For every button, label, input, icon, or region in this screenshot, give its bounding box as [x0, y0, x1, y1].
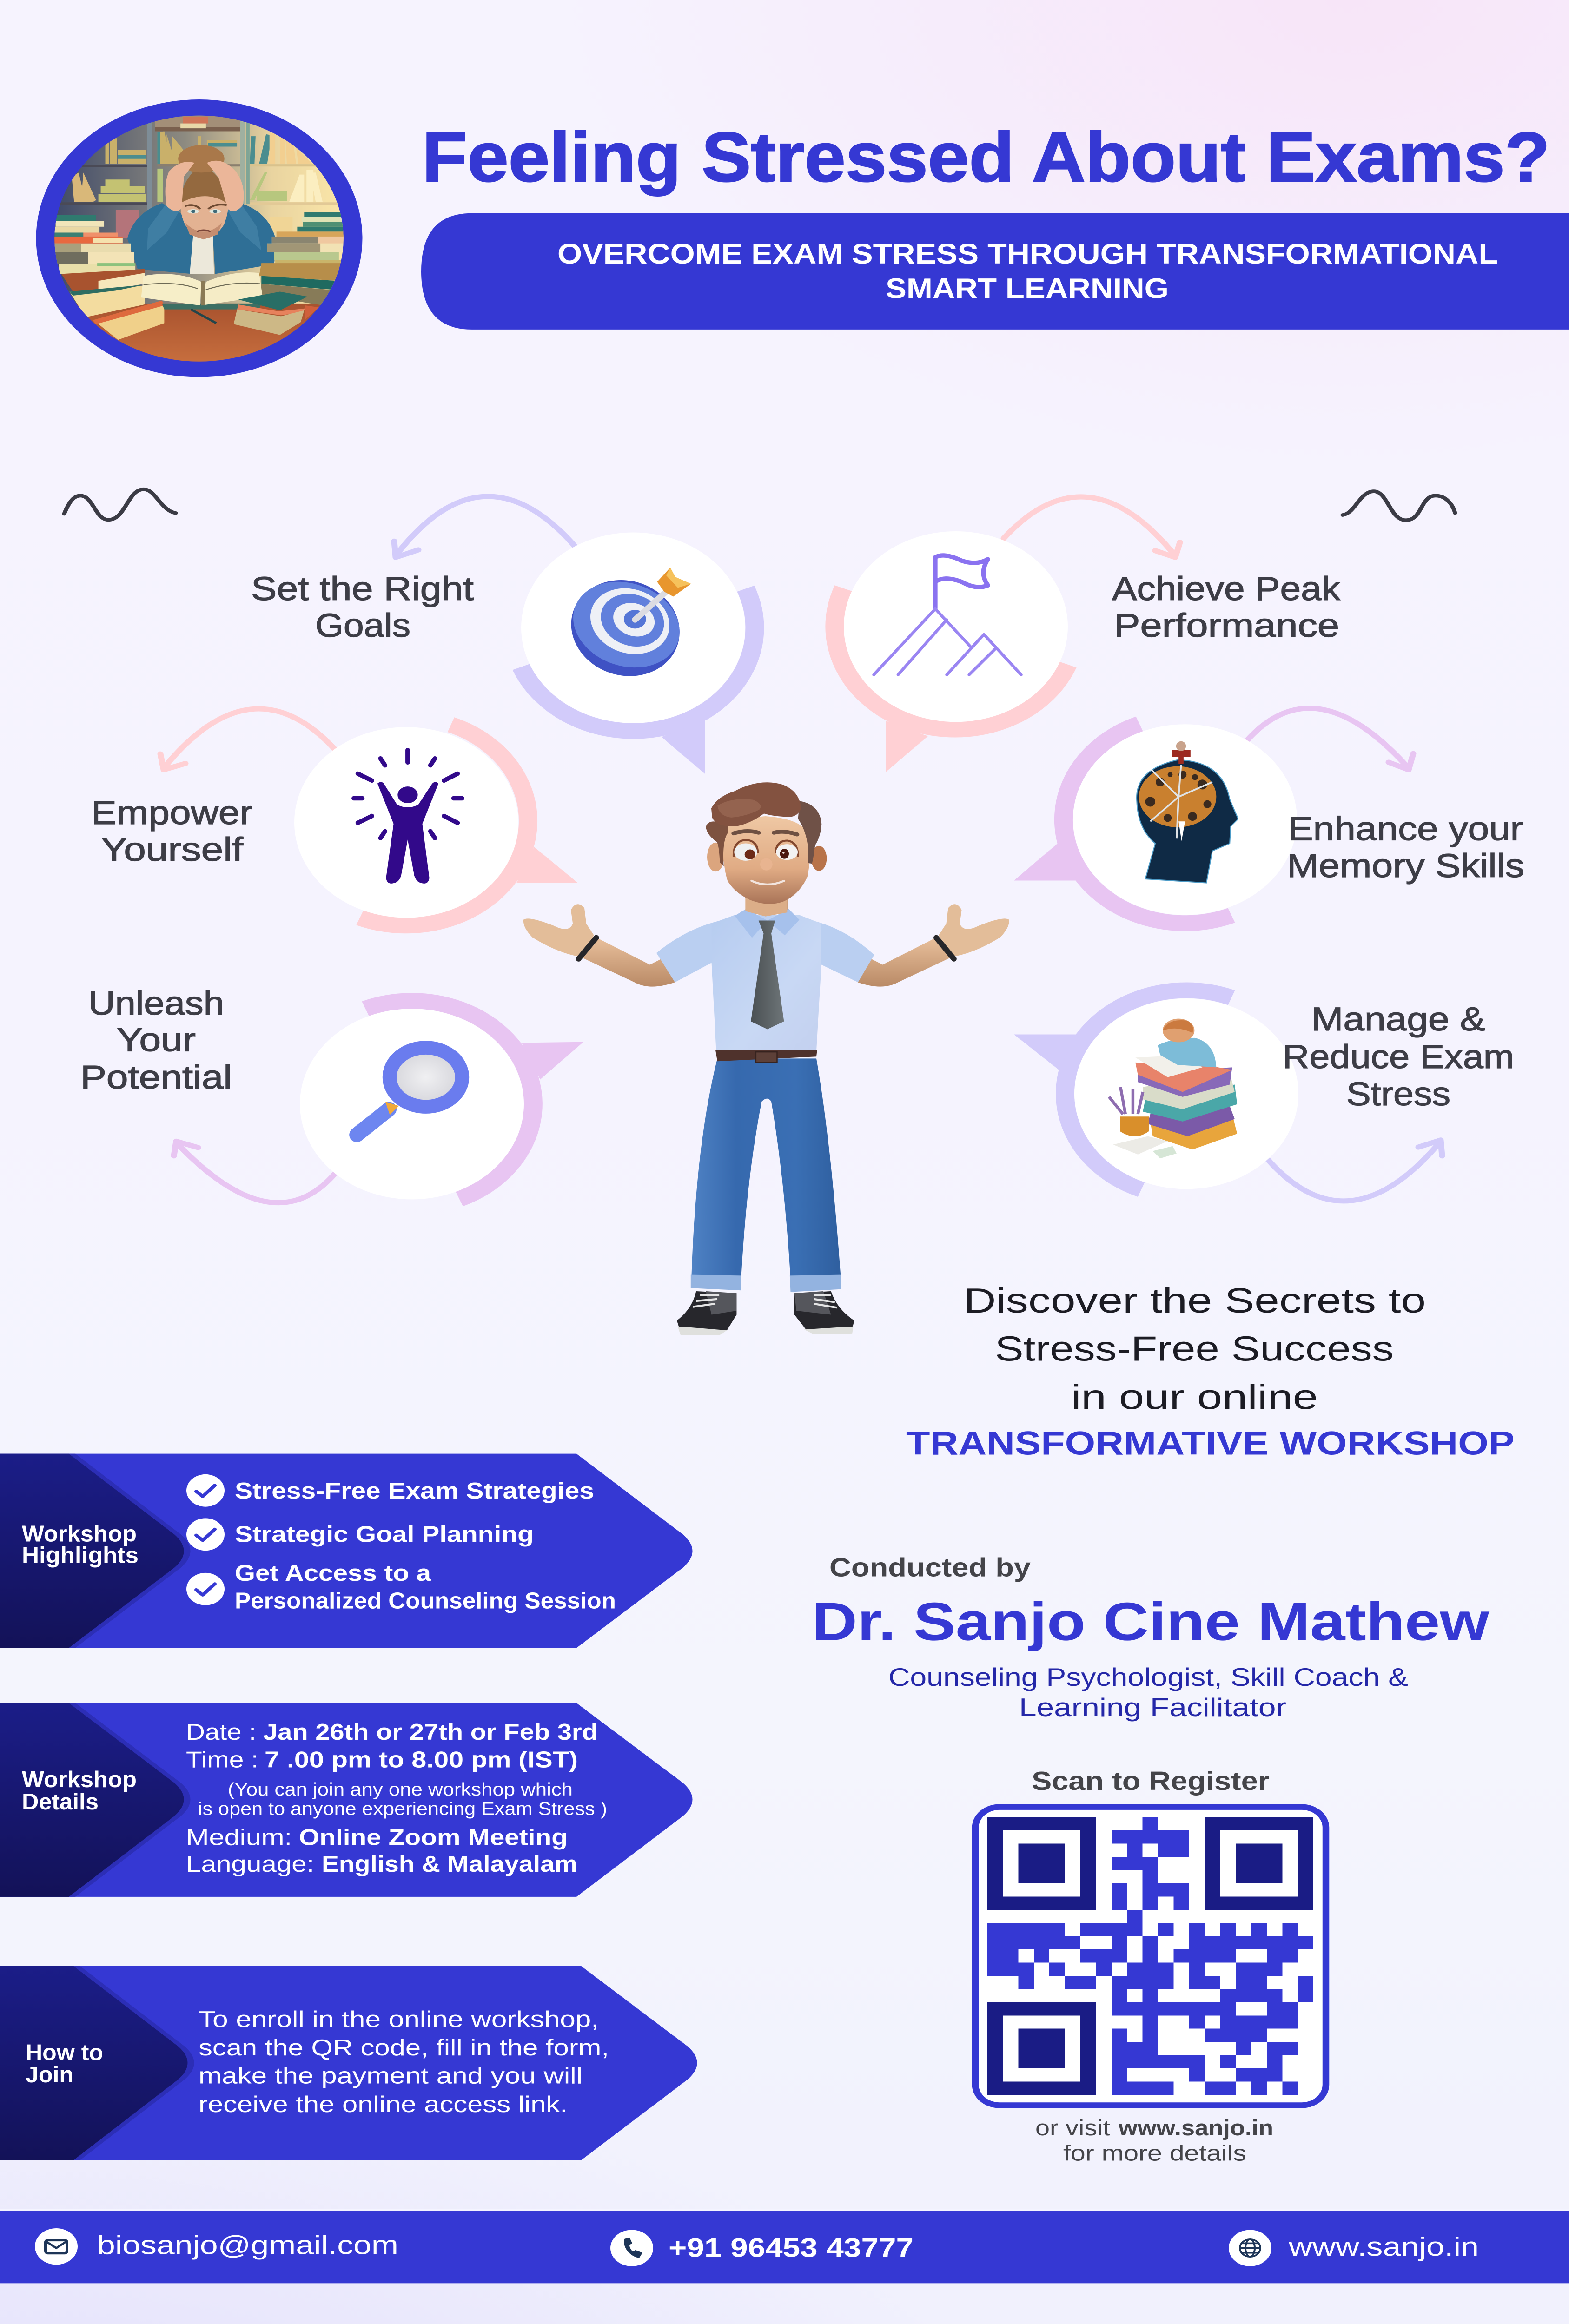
highlights list: Stress-Free Exam Strategies [235, 1478, 594, 1504]
joining instructions: make the payment and you will [199, 2063, 583, 2089]
label peak [1112, 570, 1341, 644]
tagline: discover the secrets: in our online [1071, 1378, 1318, 1417]
highlights list [235, 1478, 616, 1613]
joining instructions: scan the QR code, fill in the form, [199, 2035, 609, 2060]
joining instructions [199, 2007, 609, 2117]
website contact [1229, 2230, 1479, 2266]
curved arrow goals [394, 496, 575, 557]
label potential: Potential [80, 1058, 232, 1096]
details text: 7 .00 pm to 8.00 pm (IST) [265, 1747, 578, 1773]
facilitator details: Counseling Psychologist, Skill Coach & [888, 1663, 1408, 1691]
label memory: Memory Skills [1287, 847, 1524, 884]
label stress: Stress [1346, 1075, 1450, 1112]
details text: Date : [186, 1719, 256, 1745]
tag: how to join [26, 2040, 103, 2087]
tagline: discover the secrets: Stress-Free Success [995, 1330, 1394, 1368]
tag: workshop details [22, 1767, 137, 1815]
header photo: stressed student in circle [36, 99, 363, 377]
tag: workshop highlights [22, 1521, 139, 1568]
details text: Language: [186, 1851, 314, 1877]
subtitle banner: OVERCOME EXAM STRESS THROUGH TRANSFORMATIONAL [557, 238, 1498, 270]
facilitator details: Conducted by [829, 1553, 1031, 1582]
footer contact bar [0, 2209, 1569, 2283]
details text: is open to anyone experiencing Exam Stress ) [198, 1799, 607, 1819]
website note: or visit [1035, 2116, 1111, 2140]
item: Unleash Your Potential [80, 984, 583, 1203]
item: Manage and Reduce Exam Stress [1014, 990, 1514, 1201]
curved arrow memory [1247, 708, 1413, 770]
details text: Time : [186, 1747, 258, 1773]
curved arrow empower [160, 709, 335, 770]
label goals [251, 570, 474, 644]
website note [1035, 2116, 1273, 2166]
label empower [91, 794, 252, 868]
icon: magnifying glass [357, 1048, 462, 1135]
website note: www.sanjo.in [1118, 2116, 1273, 2140]
label potential: Unleash [88, 984, 224, 1022]
highlights list: Get Access to a [235, 1560, 431, 1586]
label empower: Yourself [101, 831, 243, 868]
speech ring memory [1014, 724, 1297, 923]
facilitator details: Learning Facilitator [1019, 1693, 1286, 1722]
details text: Jan 26th or 27th or Feb 3rd [263, 1719, 598, 1745]
label goals: Set the Right [251, 570, 474, 607]
details text: Medium: [186, 1824, 292, 1850]
label peak: Achieve Peak [1112, 570, 1341, 607]
phone contact: +91 96453 43777 [669, 2233, 914, 2263]
label stress: Reduce Exam [1283, 1038, 1514, 1075]
curved arrow peak [1004, 497, 1180, 557]
details text [186, 1719, 607, 1877]
tag: how to join: Join [26, 2062, 73, 2087]
panel: how to join [0, 1966, 697, 2160]
character head [706, 782, 827, 917]
icon: target with arrow [557, 565, 694, 691]
item: Achieve Peak Performance [834, 497, 1341, 772]
details text: (You can join any one workshop which [228, 1779, 573, 1800]
tagline: discover the secrets: Discover the Secrets to [964, 1281, 1426, 1320]
label potential [80, 984, 232, 1096]
tag: workshop highlights: Workshop [22, 1521, 137, 1547]
item: Enhance your Memory Skills [1014, 708, 1524, 923]
speech ring goals [521, 533, 755, 774]
tag: how to join: How to [26, 2040, 103, 2065]
tag: workshop highlights: Highlights [22, 1543, 139, 1568]
panel: workshop details [0, 1703, 693, 1897]
joining instructions: To enroll in the online workshop, [199, 2007, 599, 2032]
speech ring empower [294, 725, 578, 925]
curved arrow stress [1268, 1140, 1442, 1201]
subtitle banner [421, 213, 1569, 330]
icon: student on stack of books [1109, 1019, 1237, 1158]
email contact: biosanjo@gmail.com [97, 2231, 398, 2259]
central character: man with open arms [523, 782, 1009, 1335]
label stress: Manage & [1311, 1000, 1485, 1038]
highlights list: Personalized Counseling Session [235, 1588, 616, 1613]
label stress [1283, 1000, 1514, 1112]
icon: person with raised arms [354, 750, 462, 884]
decorative squiggle left [64, 489, 176, 520]
tag: workshop details: Workshop [22, 1767, 137, 1792]
highlights list: Strategic Goal Planning [235, 1521, 534, 1547]
website note: for more details [1063, 2141, 1246, 2166]
curved arrow potential [174, 1141, 335, 1203]
facilitator details [812, 1553, 1490, 1722]
item: Empower Yourself [91, 709, 578, 925]
panel: workshop highlights [0, 1454, 693, 1648]
speech ring potential [300, 1001, 583, 1199]
tagline: discover the secrets [906, 1281, 1515, 1462]
website contact: www.sanjo.in [1288, 2232, 1479, 2261]
email contact [35, 2228, 398, 2265]
label potential: Your [117, 1021, 196, 1058]
label memory: Enhance your [1288, 810, 1523, 847]
icon: flag on mountain [874, 555, 1021, 675]
QR code [975, 1807, 1326, 2105]
label memory [1287, 810, 1524, 884]
joining instructions: receive the online access link. [199, 2092, 568, 2117]
details text: English & Malayalam [322, 1851, 577, 1877]
scan to register heading: Scan to Register [1032, 1767, 1270, 1796]
label peak: Performance [1114, 607, 1339, 644]
label goals: Goals [315, 607, 410, 644]
item: Set the Right Goals [251, 496, 755, 774]
phone contact [610, 2230, 914, 2266]
label empower: Empower [91, 794, 252, 831]
speech ring peak [834, 531, 1068, 772]
decorative squiggle right [1343, 491, 1455, 520]
facilitator details: Dr. Sanjo Cine Mathew [812, 1591, 1490, 1651]
tagline: discover the secrets: TRANSFORMATIVE WORKSHOP [906, 1424, 1515, 1462]
tag: workshop details: Details [22, 1789, 99, 1815]
icon: head with clock gears [1137, 741, 1238, 883]
check icons [186, 1474, 225, 1605]
details text: Online Zoom Meeting [299, 1824, 568, 1850]
speech ring stress [1014, 990, 1298, 1189]
subtitle banner: SMART LEARNING [886, 273, 1169, 304]
